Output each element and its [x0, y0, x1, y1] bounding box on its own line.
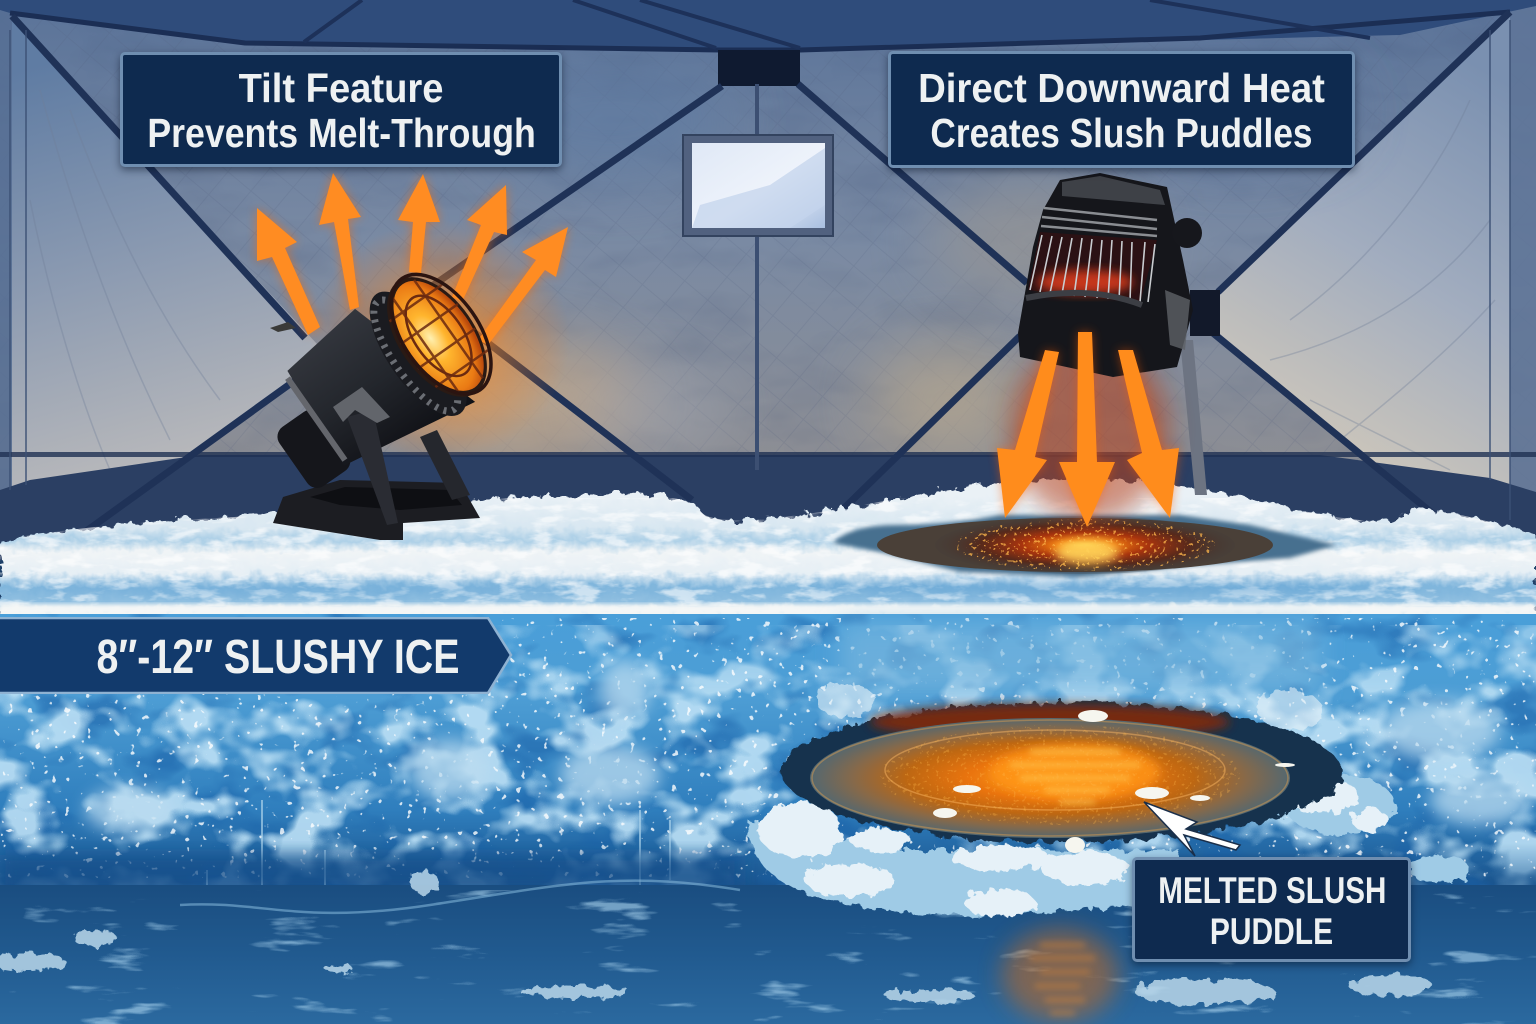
glow [310, 220, 570, 460]
label: melted slush puddle: PUDDLE [1210, 911, 1333, 952]
bottom water [0, 871, 1536, 1024]
ceiling [0, 0, 1536, 50]
right shine [1165, 290, 1190, 350]
glow [1010, 340, 1170, 520]
vents [1041, 208, 1157, 236]
bracket and front leg [347, 410, 398, 525]
surface puddle [833, 515, 1337, 577]
label: tilt feature: Tilt Feature [239, 65, 443, 111]
seam clip [270, 322, 296, 332]
light patches [400, 340, 640, 460]
label: direct downward heat: Direct Downward Heat [918, 65, 1325, 111]
upward arrows glow [257, 173, 568, 345]
label: ice thickness [0, 617, 512, 694]
label: ice thickness: 8″-12″ SLUSHY ICE [97, 631, 459, 684]
seams [12, 12, 1510, 532]
stand base [273, 480, 480, 540]
downward arrows glow [997, 332, 1179, 527]
side panels [12, 22, 317, 486]
hanging heater with downward arrows [997, 173, 1220, 527]
label: tilt feature: Prevents Melt-Through [147, 110, 536, 156]
back motor and barrel [241, 255, 516, 508]
knob [1172, 218, 1202, 248]
rear leg [420, 430, 470, 500]
ice block [0, 614, 1536, 895]
downward arrows [997, 332, 1179, 527]
orange reflection [1002, 929, 1118, 1021]
floor band [0, 455, 1536, 560]
label: direct downward heat: Creates Slush Puddles [930, 110, 1313, 156]
body [1018, 173, 1193, 377]
pole [1180, 340, 1207, 495]
bracket [1190, 290, 1220, 336]
tent background [0, 0, 1536, 560]
side strips [0, 38, 12, 490]
pale cloudy patches [85, 660, 1530, 832]
arrow: pointer to melted slush [1144, 802, 1240, 856]
snow surface [0, 479, 1536, 625]
drips [207, 800, 670, 895]
label: melted slush puddle: MELTED SLUSH [1158, 870, 1386, 911]
label: tilt feature [120, 52, 562, 167]
tilted heater with upward arrows [241, 173, 570, 540]
grill [1028, 232, 1157, 303]
label: direct downward heat [888, 51, 1355, 168]
label: melted slush puddle [1132, 857, 1411, 962]
melted slush puddle in ice [748, 684, 1470, 917]
window [683, 135, 833, 236]
upward arrows [257, 173, 568, 345]
